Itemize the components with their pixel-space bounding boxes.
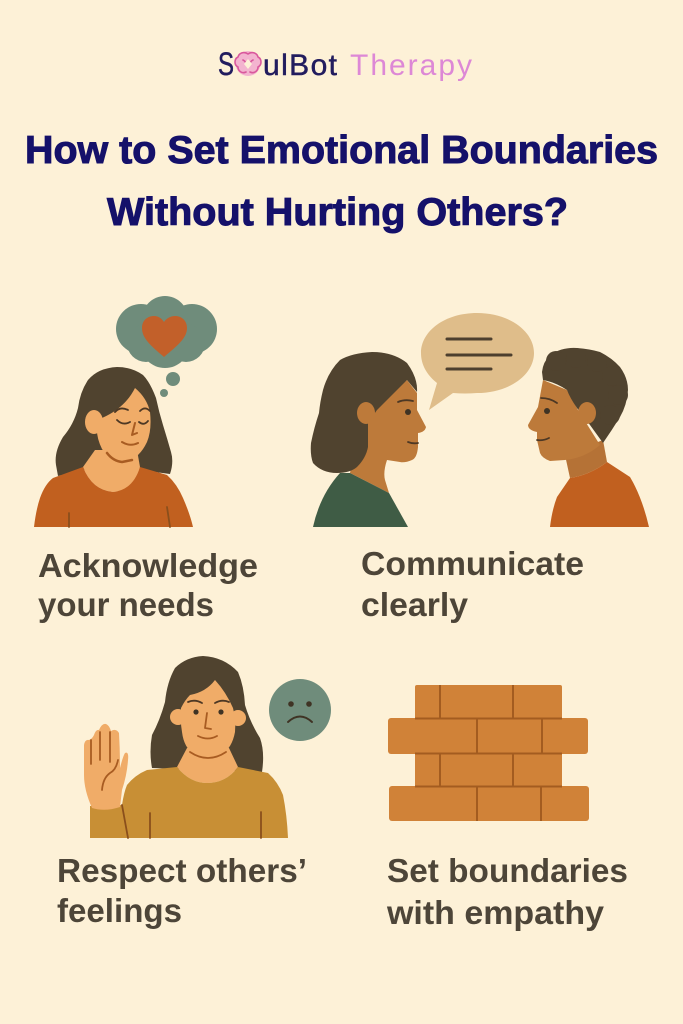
- man in profile: [528, 348, 649, 527]
- panel: communicate clearly: [311, 313, 649, 623]
- label: set boundaries with empathy: [386, 852, 628, 931]
- title: [25, 129, 658, 234]
- woman with closed eyes: [34, 367, 193, 527]
- label: acknowledge your needs: [38, 547, 258, 623]
- logo word: ulBot: ulBot: [263, 49, 338, 82]
- woman raising hand: [84, 656, 288, 838]
- label: set boundaries with empathy: with empathy: [386, 894, 605, 931]
- label: respect others' feelings: [57, 852, 307, 929]
- title: How to Set Emotional Boundaries: [25, 129, 658, 172]
- logo word: Therapy: Therapy: [350, 49, 472, 82]
- label: acknowledge your needs: your needs: [38, 586, 214, 623]
- icon: brick wall: [388, 685, 589, 821]
- icon: brain: [235, 51, 261, 76]
- label: respect others' feelings: Respect others’: [57, 852, 307, 889]
- label: communicate clearly: Communicate: [361, 545, 584, 582]
- woman in profile: [311, 352, 426, 527]
- label: acknowledge your needs: Acknowledge: [38, 547, 258, 584]
- icon: thought cloud with heart: [116, 296, 217, 397]
- icon: sad face: [269, 679, 331, 741]
- panel: respect others' feelings: [57, 656, 331, 929]
- panel: acknowledge your needs: [34, 296, 258, 623]
- speech bubble: [421, 313, 534, 410]
- label: respect others' feelings: feelings: [57, 892, 182, 929]
- panel: set boundaries with empathy: [386, 685, 628, 931]
- label: communicate clearly: clearly: [361, 586, 469, 623]
- label: communicate clearly: [361, 545, 584, 623]
- logo: [218, 46, 472, 82]
- logo word: S: S: [218, 46, 234, 82]
- label: set boundaries with empathy: Set boundaries: [387, 852, 628, 889]
- title: Without Hurting Others?: [107, 191, 568, 234]
